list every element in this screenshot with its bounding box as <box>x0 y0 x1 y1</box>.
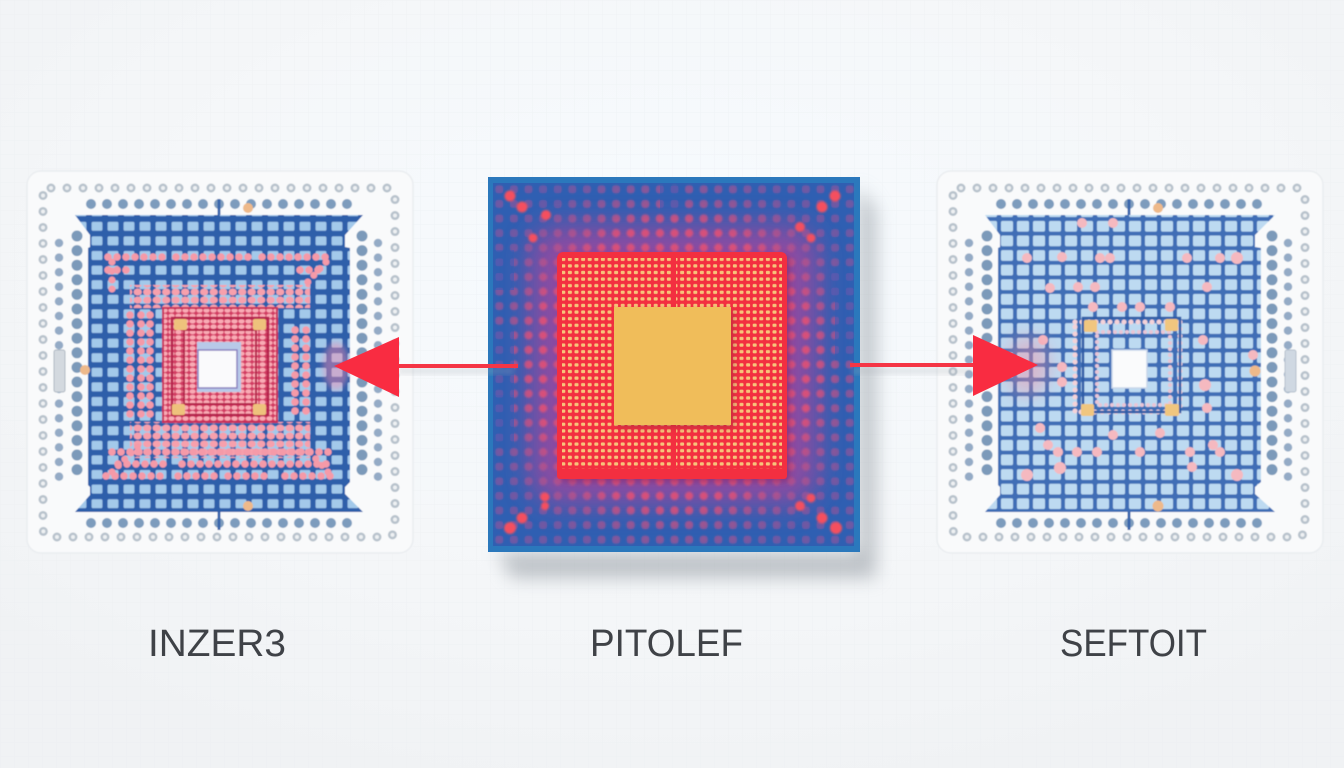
arrow: center to left chip <box>334 337 518 397</box>
blue package <box>488 177 860 552</box>
label: PITOLEF: PITOLEF <box>590 623 743 665</box>
inner bead rings <box>1075 318 1180 412</box>
magenta heat glow <box>530 226 818 504</box>
sparse pink beads <box>1021 218 1258 481</box>
hot corner dots <box>504 190 842 534</box>
gold corners <box>1081 319 1179 416</box>
drop shadow <box>497 186 876 578</box>
blue substrate grid <box>985 215 1275 512</box>
pink bead rings <box>106 257 332 476</box>
red board <box>557 252 790 482</box>
blue substrate grid <box>75 215 363 512</box>
arrow: center to right chip <box>850 335 1038 396</box>
gold corners <box>172 319 266 415</box>
slot and pins <box>1152 203 1296 512</box>
glow near arrow tip <box>1006 336 1050 396</box>
panel: right chip SEFTOIT <box>937 171 1323 553</box>
slot and pins <box>54 203 253 511</box>
label: INZER3: INZER3 <box>148 623 286 665</box>
panel: left chip INZER3 <box>27 171 413 553</box>
glow near arrow tip <box>323 342 349 390</box>
center window <box>1112 350 1147 388</box>
panel: center chip PITOLEF <box>488 177 876 578</box>
label: SEFTOIT: SEFTOIT <box>1060 623 1207 665</box>
center window <box>198 350 237 388</box>
gold die <box>614 307 734 428</box>
heat dots <box>493 183 854 546</box>
